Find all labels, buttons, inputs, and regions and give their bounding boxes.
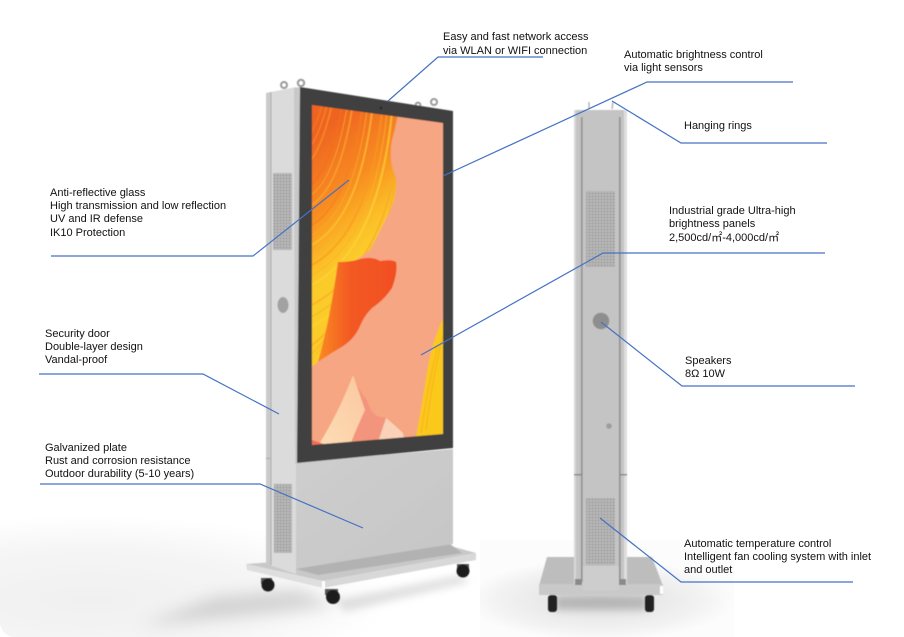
side-view base bbox=[539, 557, 663, 595]
side-view rings bbox=[589, 102, 613, 109]
side-view small button bbox=[606, 423, 612, 429]
callout: brightness panels: 2,500cd/㎡-4,000cd/㎡ bbox=[669, 231, 779, 244]
callout: brightness panels bbox=[421, 205, 825, 355]
orange blob bbox=[318, 258, 396, 362]
callout: galvanized plate: Rust and corrosion resistance bbox=[45, 455, 191, 467]
wheels bbox=[261, 564, 470, 604]
side-view lower vent bbox=[586, 498, 615, 565]
callout: galvanized plate: Galvanized plate bbox=[45, 442, 127, 454]
base tray bbox=[246, 544, 476, 588]
callout: anti-reflective glass bbox=[50, 180, 349, 256]
side-view upper vent bbox=[586, 191, 615, 267]
callout: network access: Easy and fast network access bbox=[443, 31, 589, 43]
callout: galvanized plate bbox=[40, 442, 363, 528]
callout: temperature control: Intelligent fan cooling system with inlet bbox=[684, 551, 871, 563]
side-view speaker bbox=[593, 313, 609, 329]
callout: speakers: Speakers bbox=[685, 355, 732, 367]
hanging rings front view bbox=[281, 80, 437, 107]
callout: temperature control bbox=[600, 518, 871, 582]
lower galvanized panel bbox=[296, 449, 453, 568]
product: side-view kiosk bbox=[539, 102, 663, 612]
lower vent bbox=[274, 484, 292, 553]
callout: network access bbox=[388, 31, 589, 101]
callout: security door bbox=[39, 328, 279, 414]
callout: temperature control: and outlet bbox=[684, 564, 732, 576]
callout: brightness panels: brightness panels bbox=[669, 218, 756, 230]
callout: network access: via WLAN or WIFI connection bbox=[443, 45, 587, 57]
callout: brightness panels: Industrial grade Ultra-high bbox=[669, 205, 796, 217]
upper vent bbox=[273, 173, 292, 250]
callout: anti-reflective glass: Anti-reflective glass bbox=[50, 187, 146, 199]
product: front-angle kiosk bbox=[246, 80, 476, 604]
screen artwork bbox=[305, 100, 447, 450]
side speaker bbox=[278, 297, 288, 313]
camera/light sensor bbox=[380, 107, 382, 109]
callout: anti-reflective glass: IK10 Protection bbox=[50, 227, 125, 239]
callout: speakers: 8Ω 10W bbox=[685, 368, 726, 380]
callout: galvanized plate: Outdoor durability (5-10 years) bbox=[45, 468, 194, 480]
orange swirl bbox=[305, 100, 398, 372]
callout: hanging rings: Hanging rings bbox=[684, 120, 752, 132]
display frame bbox=[297, 87, 453, 463]
callout: security door: Double-layer design bbox=[45, 341, 143, 353]
callout: brightness control: Automatic brightness control bbox=[624, 49, 763, 61]
callout: security door: Vandal-proof bbox=[45, 354, 108, 366]
side-view column bbox=[574, 110, 627, 590]
callout: speakers bbox=[601, 322, 855, 386]
cream peak bbox=[352, 386, 386, 442]
side-view wheels bbox=[548, 595, 654, 612]
callout: brightness control: via light sensors bbox=[624, 62, 703, 74]
callout: security door: Security door bbox=[45, 328, 110, 340]
callout: temperature control: Automatic temperature control bbox=[684, 538, 831, 550]
side column bbox=[266, 87, 300, 574]
yellow corner bbox=[416, 312, 446, 437]
callout: anti-reflective glass: UV and IR defense bbox=[50, 213, 143, 225]
callout: brightness control bbox=[443, 49, 793, 176]
callout: anti-reflective glass: High transmission and low reflection bbox=[50, 200, 226, 212]
callout: hanging rings bbox=[612, 101, 827, 143]
floor shadow background bbox=[0, 510, 734, 637]
swirl streaks bbox=[312, 106, 393, 354]
